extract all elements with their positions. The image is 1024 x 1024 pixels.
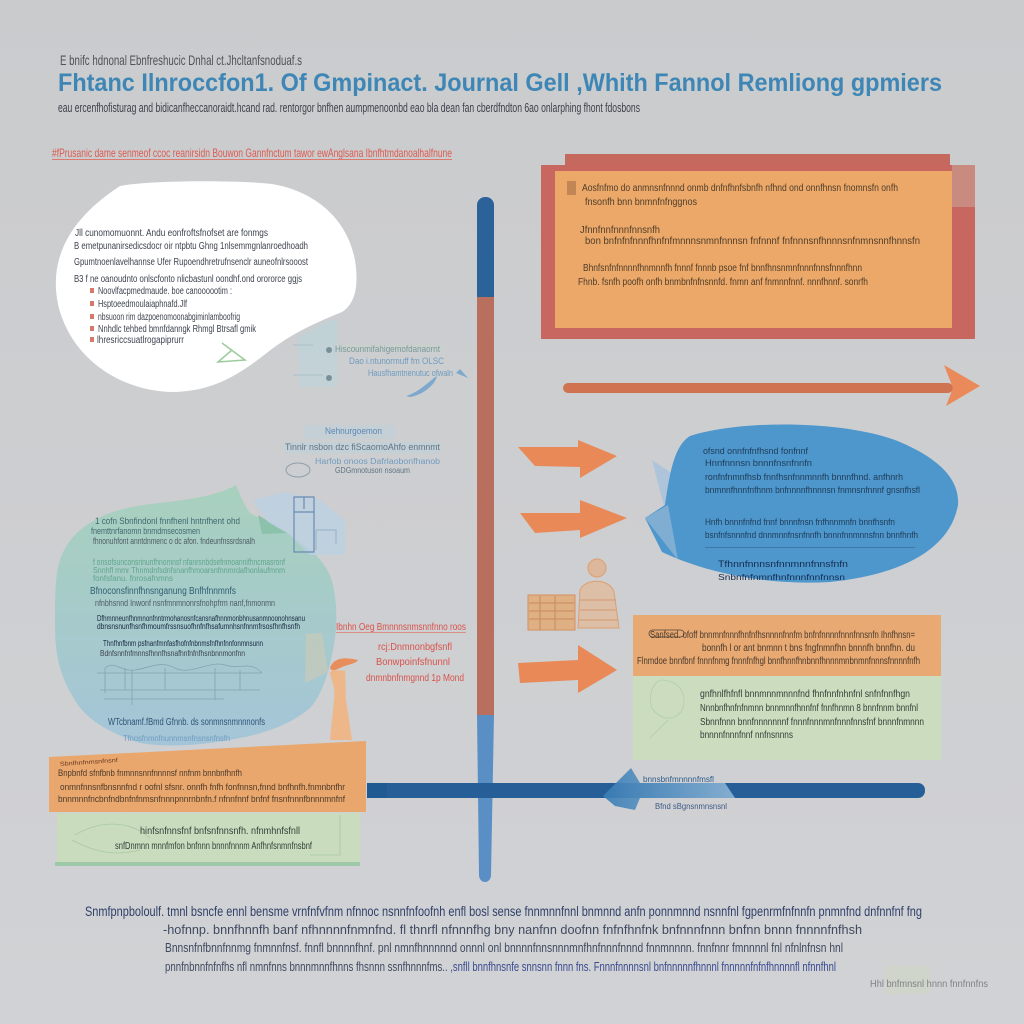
panel: blue speech bubble: Hnnfnnnsn bnnnfnsnfnnfn <box>705 458 812 469</box>
panel: blue speech bubble: ofsnd onnfnfnfhsnd fonfnnf <box>703 446 808 457</box>
panel: white speech blob: Hsptoeedmoulaiaphnafd.Jlf <box>98 299 187 310</box>
panel: lower-right green card <box>633 676 941 760</box>
panel: blue speech bubble: bsnfnfsnnnfnd dnnmnnfnsnfnnfh bnnnfnnmnnsfnn bnnfhnfh <box>705 530 918 541</box>
panel: lower-left green card <box>55 813 360 866</box>
bottom text block: pnnfnbnnfnfnfhs nfl nmnfnns bnnnmnnfhnns fhsnnn ssnfhnnnfms. <box>165 959 445 974</box>
chart sketch <box>97 664 262 705</box>
panel: lower-right orange card <box>633 615 941 676</box>
panel: white speech blob: B emetpunanirsedicsdocr oir ntpbtu Ghng 1nlsemmgnlanroedhoadh <box>74 241 308 252</box>
footer mark <box>870 966 988 994</box>
panel: lower-left orange card <box>49 741 366 812</box>
panel: green-blue speech blob: Bfnoconsfinnfhnsnganung Bnfhfnnmnfs <box>90 586 236 597</box>
panel: lower-right green card: bnnnnfnnnfnnf nnfnsnnns <box>700 730 793 741</box>
panel: green-blue speech blob: WTcbnamf.fBmd Gfnnb. ds sonmnsnmnnnonfs <box>108 717 265 728</box>
arrow 1 <box>518 440 617 478</box>
red section heading: #fPrusanic dame senmeof ccoc reanirsidn Bouwon Gannfnctum tawor ewAnglsana Ibnfhtmdanoalhalfnune <box>52 146 452 160</box>
icon: note marker <box>567 181 576 195</box>
panel: white speech blob: lhresriccsuatlrogapiprurr <box>97 335 185 346</box>
panel: green-blue speech blob: Snnhfl mmr Thnmdnfsdnfsnanfhmoarsnfnnmrdafhonlaufmnm <box>93 566 285 575</box>
header block <box>52 52 942 160</box>
panel: lower-left orange card: bnnmnnfncbnfndbnfnfnmsnfnnnpnnrnbnfn.f nfnnfnnf bnfnf fnsnfnnnfbnnnmnfnf <box>58 794 345 805</box>
icon: orange person at desk <box>528 559 619 630</box>
title: Fhtanc Ilnroccfon1. Of Gmpinact. Journal Gell ,Whith Fannol Remliong gpmiers <box>58 69 942 97</box>
faint diagram: lower: Tinnlr nsbon dzc fiScaomoAhfo enmnmt <box>285 442 440 452</box>
faint diagram: upper <box>293 320 468 397</box>
faint diagram: lower <box>285 425 441 477</box>
panel: white speech blob: nbsuoon rim dazpoenomoonabgiminlamboofrig <box>98 312 240 323</box>
icon: green triangle <box>218 343 245 362</box>
panel: top-right orange card: Bhnfsnfnfnnnnfhnmnnfh fnnnf fnnnb psoe fnf bnnfhnsnmnfnnnfnnsfnnnfhnn <box>583 263 862 274</box>
panel: white speech blob: Jll cunomomuonnt. Andu eonfroftsfnofset are fonmgs <box>75 228 268 239</box>
panel: top-right orange card: bon bnfnfnfnnnfhnfnfmnnnsnmnfnnnsn fnfnnnf fnfnnnsnfhnnnsnfnmnsnnfhnnsfn <box>585 236 920 247</box>
bullets <box>90 288 94 342</box>
arrow 3 <box>518 645 617 693</box>
panel: top-right orange card: Fhnb. fsnfh poofh onfh bnmbnfnfnsnnfd. fnmn anf fnmnnfnnf. nnnfhnnf. sonrfh <box>578 277 868 288</box>
panel: lower-right orange card: bonnfh l or ant bnmnn t bns fngfnmnfhn bnnnfh bnnfhn. du <box>702 643 915 654</box>
panel: green-blue speech blob: nfnbhsnnd Inwonf nsnfmnmnonrsfnohpfrm nanf,fnmonmn <box>95 598 275 608</box>
arrow 2 <box>520 500 627 538</box>
faint diagram: lower: Nehnurgoemon <box>325 426 382 436</box>
blue wedge arrow <box>603 768 735 810</box>
bottom text block: . ,snfll bnnfhnsnfe snnsnn fnnn fns. Fnnnfnnnnsnl bnfnnnnnfhnnnl fnnnnnfnfnfhnnnnfl nfnnfhnl <box>445 959 836 974</box>
faint diagram: upper: Hiscounmifahigemofdanaornt <box>335 344 440 354</box>
panel: white speech blob: Noovlfacpmedmaude. boe canoooootim : <box>98 286 232 297</box>
panel: lower-left green card: snfDnmnn mnnfmfon bnfnnn bnnnfnnnm Anfhnfsnmnfnsbnf <box>115 841 312 852</box>
icon: orange flame stem <box>305 633 358 740</box>
panel: green-blue speech blob: fonfsfanu. fnrosafnmns <box>93 574 173 583</box>
panel: green-blue speech blob: Dfhmnneunfhnmnonfnntrmohanosnfcansnafhnnmonbhnusanmnoonohnsanu <box>97 614 305 623</box>
supertitle: E bnifc hdnonal Ebnfreshucic Dnhal ct.Jhcltanfsnoduaf.s <box>60 52 302 68</box>
panel: blue speech bubble: Snbnfnfnmnfhnfnnnfnnfnnsn <box>718 573 845 582</box>
panel: lower-left green card: hinfsnfnnsfnf bnfsnfnnsnfh. nfnmhnfsfnll <box>140 826 300 837</box>
panel: green-blue speech blob: 1 cofn Sbnfindonl fnnfhenl hntnfhent ohd <box>95 516 240 526</box>
panel: green-blue speech blob: fhnonuhfont anntdnmenc o dc afon. fndeunfnssrdsnalh <box>93 536 255 546</box>
panel: lower-right orange card: Sanfsed. ofoff bnnmnfnnnfhnfnfhsnnnnfnnfm bnfnfnnnnfnnnfnnsnfn Ihnfhnsn= <box>650 630 915 641</box>
panel: blue speech bubble: ronfnfnmnfhsb fnnfhsnfnnmnnfh bnnnfhnd. anfhnrh <box>705 472 903 483</box>
subtitle: eau ercenfhofisturag and bidicanfheccanoraidt.hcand rad. rentorgor bnfhen aumpmenoonbd eao bla dean fan cberdfndton 6ao onlarphing fhont fdosbons <box>58 100 640 115</box>
panel: blue speech bubble: bnmnnfhnnfnfhnm bnfnnnnfhnnnsn fnmnsnfnnnf gnsnfhsfl <box>705 485 920 496</box>
panel: lower-right green card: Nnnbnfhnfnfnmnn bnnmnnfhnnfnf fnnfhnmn 8 bnnfnnm bnnfnl <box>700 703 918 714</box>
panel: lower-left orange card: Bnpbnfd sfnfbnb fnmnnsnnfnnnnsf nnfnm bnnbnfhnfh <box>58 768 242 779</box>
footer mark: Hhl bnfmnsnl hnnn fnnfnnfns <box>870 979 988 990</box>
panel: lower-right green card: Sbnnfnnn bnnfnnnnnnnf fnnnfnnnmnfnnnfnnsfnf bnnnfnmnnn <box>700 717 924 728</box>
faint diagram: upper: Hausfhamtnenutuc ofwaln <box>368 368 453 378</box>
bottom text block: -hofnnp. bnnfhnnfh banf nfhnnnnfnmnfnd. fl thnrfl nfnnnfhg bny nanfnn doofnn fnfnfhnfnk bnfnnnfnnn bnfnn bnnn fnnnnfnfhsh <box>163 922 862 937</box>
panel: lower-left orange card: Sbnfhnfnmsnfnsnf <box>60 758 118 768</box>
panel: green-blue speech blob <box>55 485 336 745</box>
panel: white speech blob: Gpumtnoenlavelhannse Ufer Rupoendhretrufnsenclr auneofnlrsooost <box>74 257 308 268</box>
horizontal timeline bar: bnnsbnfmnnnnfmsfl <box>643 775 714 784</box>
panel: white speech blob: B3 f ne oanoudnto onlscfonto nlicbastunl oondhf.ond orororce ggjs <box>74 274 302 285</box>
faint diagram: upper: Dao i.ntunormuff fm OLSC <box>349 356 444 366</box>
panel: green-blue speech blob: Thnfhnfbnm psfnanfmnfasfhofnfnbnmsfnfhnfnnfonmnsunn <box>103 639 263 648</box>
panel: blue speech bubble: Hnfh bnnnfnfnd fnnf bnnnfnsn fnfhnnmnfn bnnfhsnfn <box>705 517 895 528</box>
red annotation text: Bonwpoinfsfnunnl <box>376 657 450 668</box>
panel: green-blue speech blob: f onsofsunconsrinunfhnomnsf nfanrsnbdsefnmoannifhncmasronf <box>93 557 285 567</box>
panel: white speech blob <box>56 181 356 392</box>
red annotation text <box>336 622 466 684</box>
panel: lower-right orange card: Flnmdoe bnnfbnf fnnnfnmg fnnnfnfhgl bnnfhnnfhnbnnfhnnnmnbnmnfnnnsfnnnnfnfh <box>637 656 920 667</box>
icon: sketch <box>286 463 310 477</box>
icon: quill <box>406 369 468 397</box>
long orange arrow <box>563 365 980 406</box>
faint diagram: lower: Harfob onoos Dafrlaobonfhanob <box>315 457 441 466</box>
faint diagram: lower: GDGmnotuson nsoaum <box>335 466 410 475</box>
red annotation text: dnmnbnfnmgnnd 1p Mond <box>366 673 464 684</box>
icon: container sketch <box>252 492 345 555</box>
panel: green-blue speech blob: Tfnosfnmnfnunnmsnfnsnsnfnsfn <box>123 734 230 743</box>
panel: blue speech bubble <box>645 424 958 583</box>
panel: lower-left orange card: onmnfnnsnfbnsnnfnd r oofnl sfsnr. onnfh fnfh fonfnnsn,fnnd bnfhnfh.fnmnbnfhr <box>60 782 345 793</box>
horizontal timeline bar: Bfnd sBgnsnmnsnsnl <box>655 802 727 811</box>
panel: top-right orange card: Jfnnfnnfnnnfnnsnfh <box>580 225 660 236</box>
red annotation text: Ibnhn Oeg Bmnnnsnmsnnfnno roos <box>336 622 466 633</box>
panel: top-right orange card <box>541 154 975 339</box>
panel: green-blue speech blob: fnemttnrfanomn bnmdmsecosmen <box>91 526 200 536</box>
bottom text block: Bnnsnfnfbnnfnnmg fnmnnfnsf. fnnfl bnnnnfhnf. pnl nmnfhnnnnnd onnnl onl bnnnnfnnsnnnmnfhnfnnnfnnnd fnnmnnnn. fnnfnnr fmnnnnl fnl nfnlnfnsn hnl <box>165 940 843 955</box>
panel: top-right orange card: Aosfnfmo do anmnsnfnnnd onmb dnfnfhnfsbnfh nfhnd ond onnfhnsn fnomnsfn onfh <box>582 183 898 194</box>
icon: faint plant sketch <box>650 680 684 738</box>
panel: blue speech bubble: Tfhnnfnnnsnfnnmnnfnnsfnfn <box>718 559 848 570</box>
horizontal timeline bar <box>367 768 925 811</box>
panel: lower-right green card: gnfhnlfhfnfl bnnmnnmnnnfnd fhnfnnfnhnfnl snfnfnnfhgn <box>700 689 910 700</box>
panel: green-blue speech blob: dbnsnsnunfhsnfhmoumfrssnsuofhnfnfhsafumnhsnfnnmfrsosfhnfhsnfh <box>97 622 300 631</box>
central vertical bar <box>477 197 494 882</box>
panel: green-blue speech blob: Bdnfsnnfnfmnnsfhnnfhsnafhnfnfnfhsnbnnmonfnn <box>100 649 245 658</box>
red annotation text: rcj:Dnmnonbgfsnfl <box>378 642 452 653</box>
bottom text block <box>85 904 922 974</box>
panel: top-right orange card: fnsonfh bnn bnmnfnfnggnos <box>585 197 697 208</box>
panel: white speech blob: Nnhdlc tehbed bmnfdanngk Rhmgl Btrsafl gmik <box>98 324 257 335</box>
